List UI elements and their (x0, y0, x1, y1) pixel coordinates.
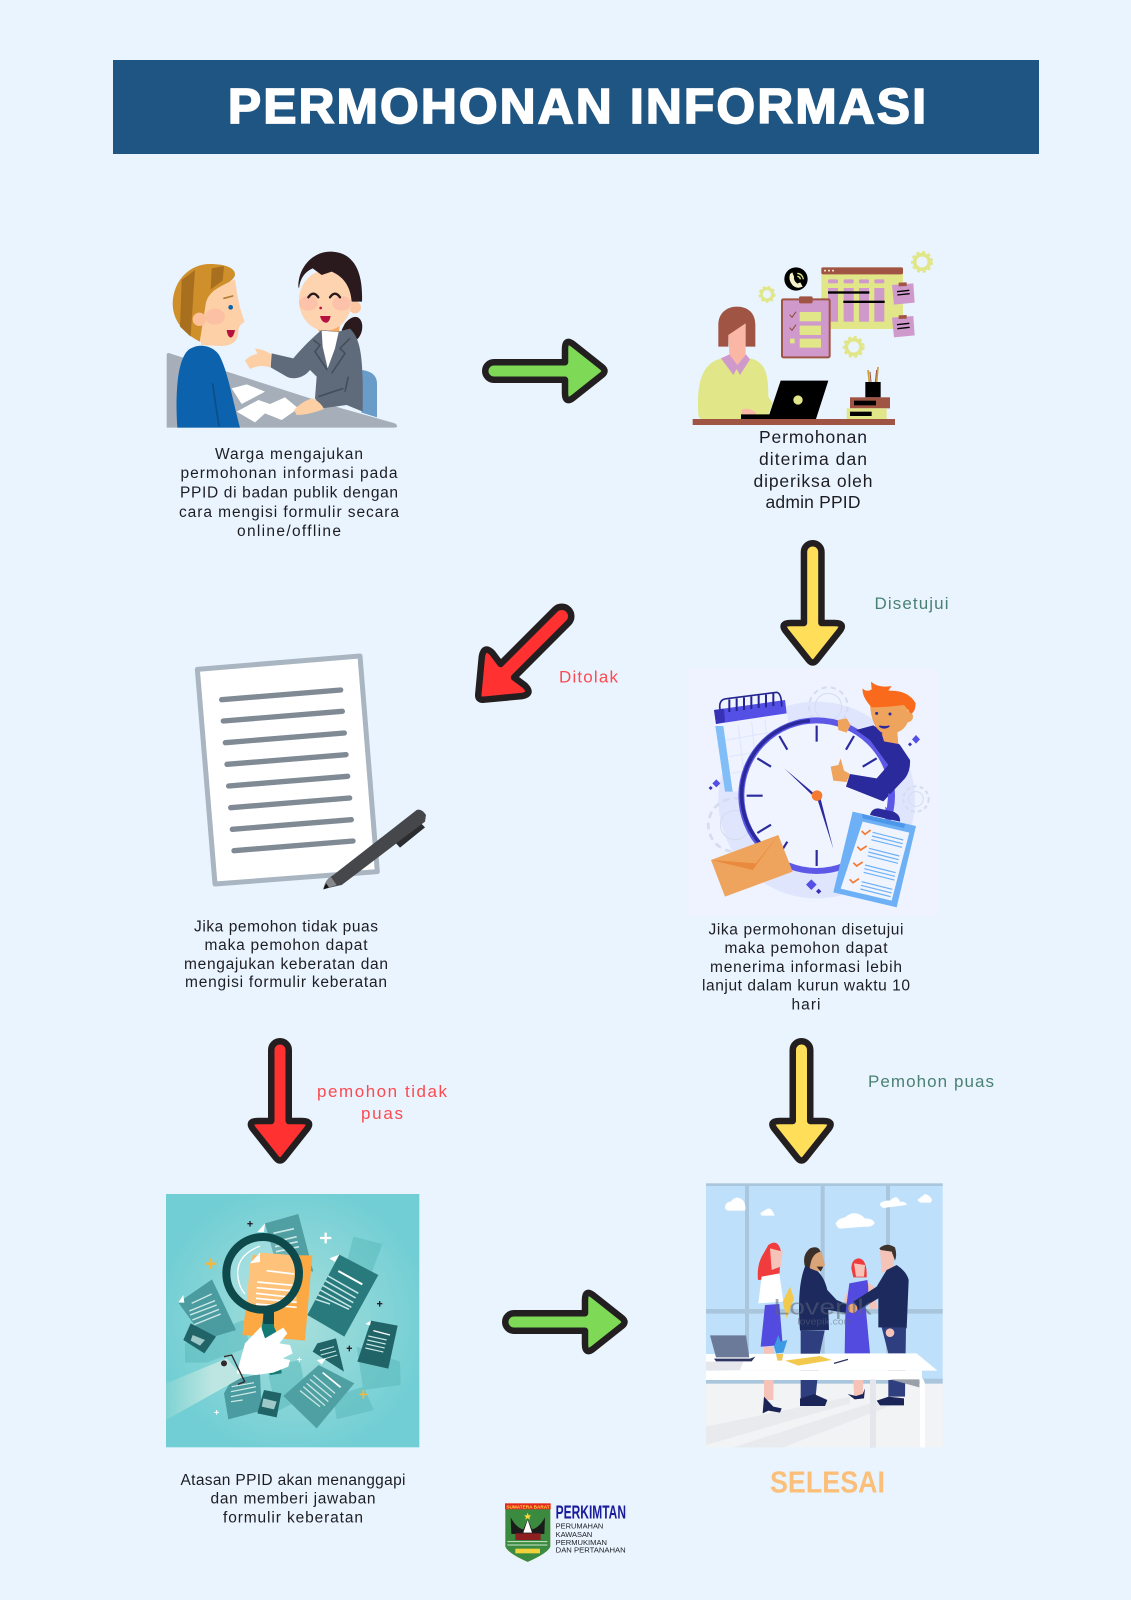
man (831, 682, 916, 801)
text: step 2 description: diperiksa oleh (754, 471, 872, 491)
wordmark: PERMUKIMAN (556, 1540, 607, 1547)
arrow: green right to finish (505, 1293, 624, 1351)
watermark: Lovepik (773, 1294, 873, 1319)
clock (741, 720, 893, 872)
text: step 1 description (179, 446, 399, 540)
text: approved description: menerima informasi lebih (710, 959, 902, 976)
text: step 2 description: admin PPID (766, 492, 860, 512)
sparkles (709, 735, 920, 894)
label: pemohon tidak puas (317, 1082, 448, 1123)
text: objection description: mengajukan keberatan dan (184, 956, 388, 973)
phone badge (784, 267, 808, 291)
text: approved description (702, 922, 910, 1014)
shield: SUMATERA BARAT (506, 1504, 550, 1509)
text: step 1 description: permohonan informasi pada (180, 465, 398, 482)
text: SELESAI: SELESAI (770, 1464, 885, 1500)
logo: Perkimtan (505, 1501, 626, 1562)
icon: admin at laptop (693, 252, 932, 425)
clipboard (833, 793, 916, 907)
dark documents (178, 1255, 398, 1428)
icon: clock, man and clipboard (688, 668, 938, 917)
table (706, 1335, 937, 1448)
title banner: PERMOHONAN INFORMASI (228, 79, 926, 134)
watermark: lovepik.com (797, 1316, 852, 1326)
calendar (714, 692, 798, 792)
wordmark: PERUMAHAN (556, 1524, 603, 1531)
paper behind magnifier (265, 1214, 313, 1272)
wordmark: KAWASAN (556, 1532, 592, 1539)
clouds (725, 1194, 932, 1229)
icon: documents under magnifier (166, 1194, 419, 1447)
text: step 2 description (754, 427, 872, 512)
envelope (711, 835, 793, 897)
text: approved description: maka pemohon dapat (724, 940, 888, 957)
wordmark (556, 1501, 626, 1555)
text: approved description: Jika permohonan disetujui (708, 922, 904, 938)
text: objection description: Jika pemohon tidak puas (194, 918, 378, 936)
text: superior response description: formulir keberatan (223, 1510, 363, 1526)
arrow: red diagonal, rejected (458, 588, 590, 720)
arm and hand (166, 1327, 293, 1420)
arrow: green right to step 2 (485, 342, 604, 400)
gears (760, 252, 932, 357)
label: pemohon tidak puas: pemohon tidak (317, 1082, 448, 1101)
man with beard (799, 1247, 848, 1406)
text: step 2 description: diterima dan (759, 449, 867, 469)
woman (698, 307, 773, 419)
laptop (741, 381, 828, 419)
arrow: yellow down, applicant satisfied (772, 1041, 831, 1160)
label: Ditolak: Ditolak (559, 668, 618, 686)
icon: business handshake office (706, 1183, 943, 1448)
faded documents (185, 1237, 401, 1419)
floor stripes (706, 1397, 897, 1447)
title banner (113, 60, 1039, 154)
woman in blue dress (844, 1258, 877, 1399)
label: pemohon tidak puas: puas (361, 1104, 403, 1123)
label: Pemohon puas: Pemohon puas (868, 1072, 994, 1091)
text: superior response description (180, 1472, 406, 1526)
arrow: red down, applicant not satisfied (251, 1041, 309, 1160)
woman in red hair (758, 1243, 794, 1413)
desk (693, 419, 895, 425)
arrow: yellow down, approved (784, 543, 842, 662)
text: step 1 description: PPID di badan publik dengan (180, 484, 398, 502)
wordmark: DAN PERTANAHAN (556, 1548, 626, 1555)
text: approved description: lanjut dalam kurun waktu 10 (702, 978, 910, 994)
wordmark: PERKIMTAN (556, 1501, 626, 1522)
text: superior response description: Atasan PPID akan menanggapi (180, 1472, 406, 1489)
icon: citizen consulting officer (167, 252, 397, 428)
text: objection description: maka pemohon dapat (204, 937, 368, 954)
schedule board (821, 267, 915, 337)
clipboard (782, 296, 830, 357)
text: step 1 description: online/offline (237, 523, 341, 540)
orange folder (242, 1255, 312, 1341)
text: step 1 description: Warga mengajukan (215, 446, 363, 463)
watermark (773, 1294, 873, 1326)
text: step 1 description: cara mengisi formulir secara (179, 504, 399, 521)
sparks (206, 1221, 382, 1415)
text: superior response description: dan memberi jawaban (210, 1490, 376, 1508)
text: approved description: hari (792, 996, 820, 1014)
books and pencils (847, 367, 890, 419)
man in suit (848, 1245, 909, 1405)
text: step 2 description: Permohonan (759, 427, 867, 447)
text: objection description: mengisi formulir keberatan (185, 974, 387, 991)
icon: document and pen (197, 656, 426, 889)
label: Disetujui: Disetujui (874, 594, 948, 613)
text: objection description (184, 918, 388, 991)
window frames (706, 1183, 943, 1384)
magnifier (226, 1237, 299, 1375)
